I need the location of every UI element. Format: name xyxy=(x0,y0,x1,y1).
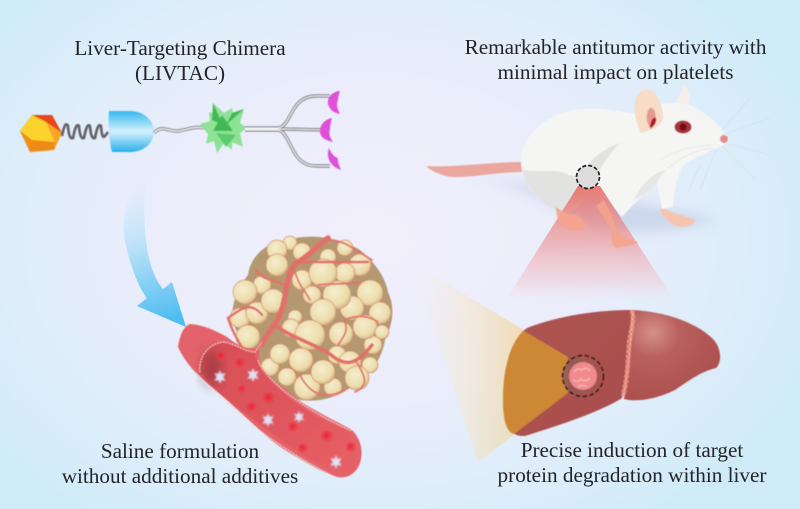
yellow projection beam xyxy=(412,262,568,462)
heading: antitumor activity: minimal impact on platelets xyxy=(498,60,733,84)
liver xyxy=(503,310,720,436)
icon: green star core xyxy=(200,103,247,153)
vessel inner shadow xyxy=(202,350,222,386)
left lobe xyxy=(503,310,632,436)
Y-branched linker highlight xyxy=(245,96,330,166)
vessel open interior xyxy=(200,342,356,472)
right lobe xyxy=(624,310,720,400)
far front leg xyxy=(596,200,638,248)
front leg shading xyxy=(634,170,666,200)
tumor xyxy=(228,236,392,401)
molecule: LIVTAC chimera xyxy=(20,91,341,170)
vessel outer wall xyxy=(178,324,362,477)
orange highlight on liver xyxy=(503,331,568,434)
belly shading xyxy=(522,143,620,212)
red blood cells xyxy=(216,351,356,453)
near paw xyxy=(660,207,695,227)
tumor halo xyxy=(562,358,598,394)
saline particles xyxy=(214,368,342,469)
body xyxy=(521,103,729,217)
nose xyxy=(720,135,728,143)
liver tumor xyxy=(569,362,597,390)
caption: target protein degradation: Precise induction of target xyxy=(521,438,743,462)
shadow under mouse xyxy=(470,176,720,232)
icon: blue capsule ligand xyxy=(109,111,154,152)
hind foot xyxy=(556,207,586,231)
vessel cut edge xyxy=(196,342,352,477)
dashed circle: injection site xyxy=(576,166,600,188)
dashed circle: target xyxy=(562,356,604,396)
tumor texture xyxy=(573,368,590,387)
arrow: curved blue xyxy=(124,172,186,327)
mouse xyxy=(426,85,770,232)
heading: antitumor activity: Remarkable antitumor activity with xyxy=(465,35,766,59)
wavy linker xyxy=(154,127,204,133)
ear canal xyxy=(650,118,656,128)
caption: target protein degradation: protein degradation within liver xyxy=(498,463,766,487)
heading: liver-targeting chimera: (LIVTAC) xyxy=(135,61,225,85)
tumor blood vessels xyxy=(228,238,378,395)
icon: spring linker xyxy=(62,124,108,138)
icon: icosahedron warhead xyxy=(20,115,62,152)
eye pupil xyxy=(680,124,686,130)
tail xyxy=(426,162,522,177)
caption: saline formulation: without additional additives xyxy=(62,464,298,488)
whiskers xyxy=(660,98,770,192)
wavy linker core xyxy=(154,127,204,133)
mouse paws in beam xyxy=(556,200,638,248)
Y-branched linker xyxy=(245,96,330,166)
heading: liver-targeting chimera: Liver-Targeting Chimera xyxy=(74,36,286,60)
tumor backing mass xyxy=(232,237,392,401)
tumor nodules xyxy=(230,236,391,400)
caption: saline formulation: Saline formulation xyxy=(101,439,259,463)
ear far xyxy=(675,85,689,105)
icon: magenta ligands xyxy=(320,91,341,170)
falciform ligament xyxy=(623,310,633,396)
ear near xyxy=(634,90,663,133)
blood vessel xyxy=(178,324,362,477)
eye xyxy=(674,120,692,134)
ear inner xyxy=(647,108,656,129)
red projection beam xyxy=(506,186,674,300)
